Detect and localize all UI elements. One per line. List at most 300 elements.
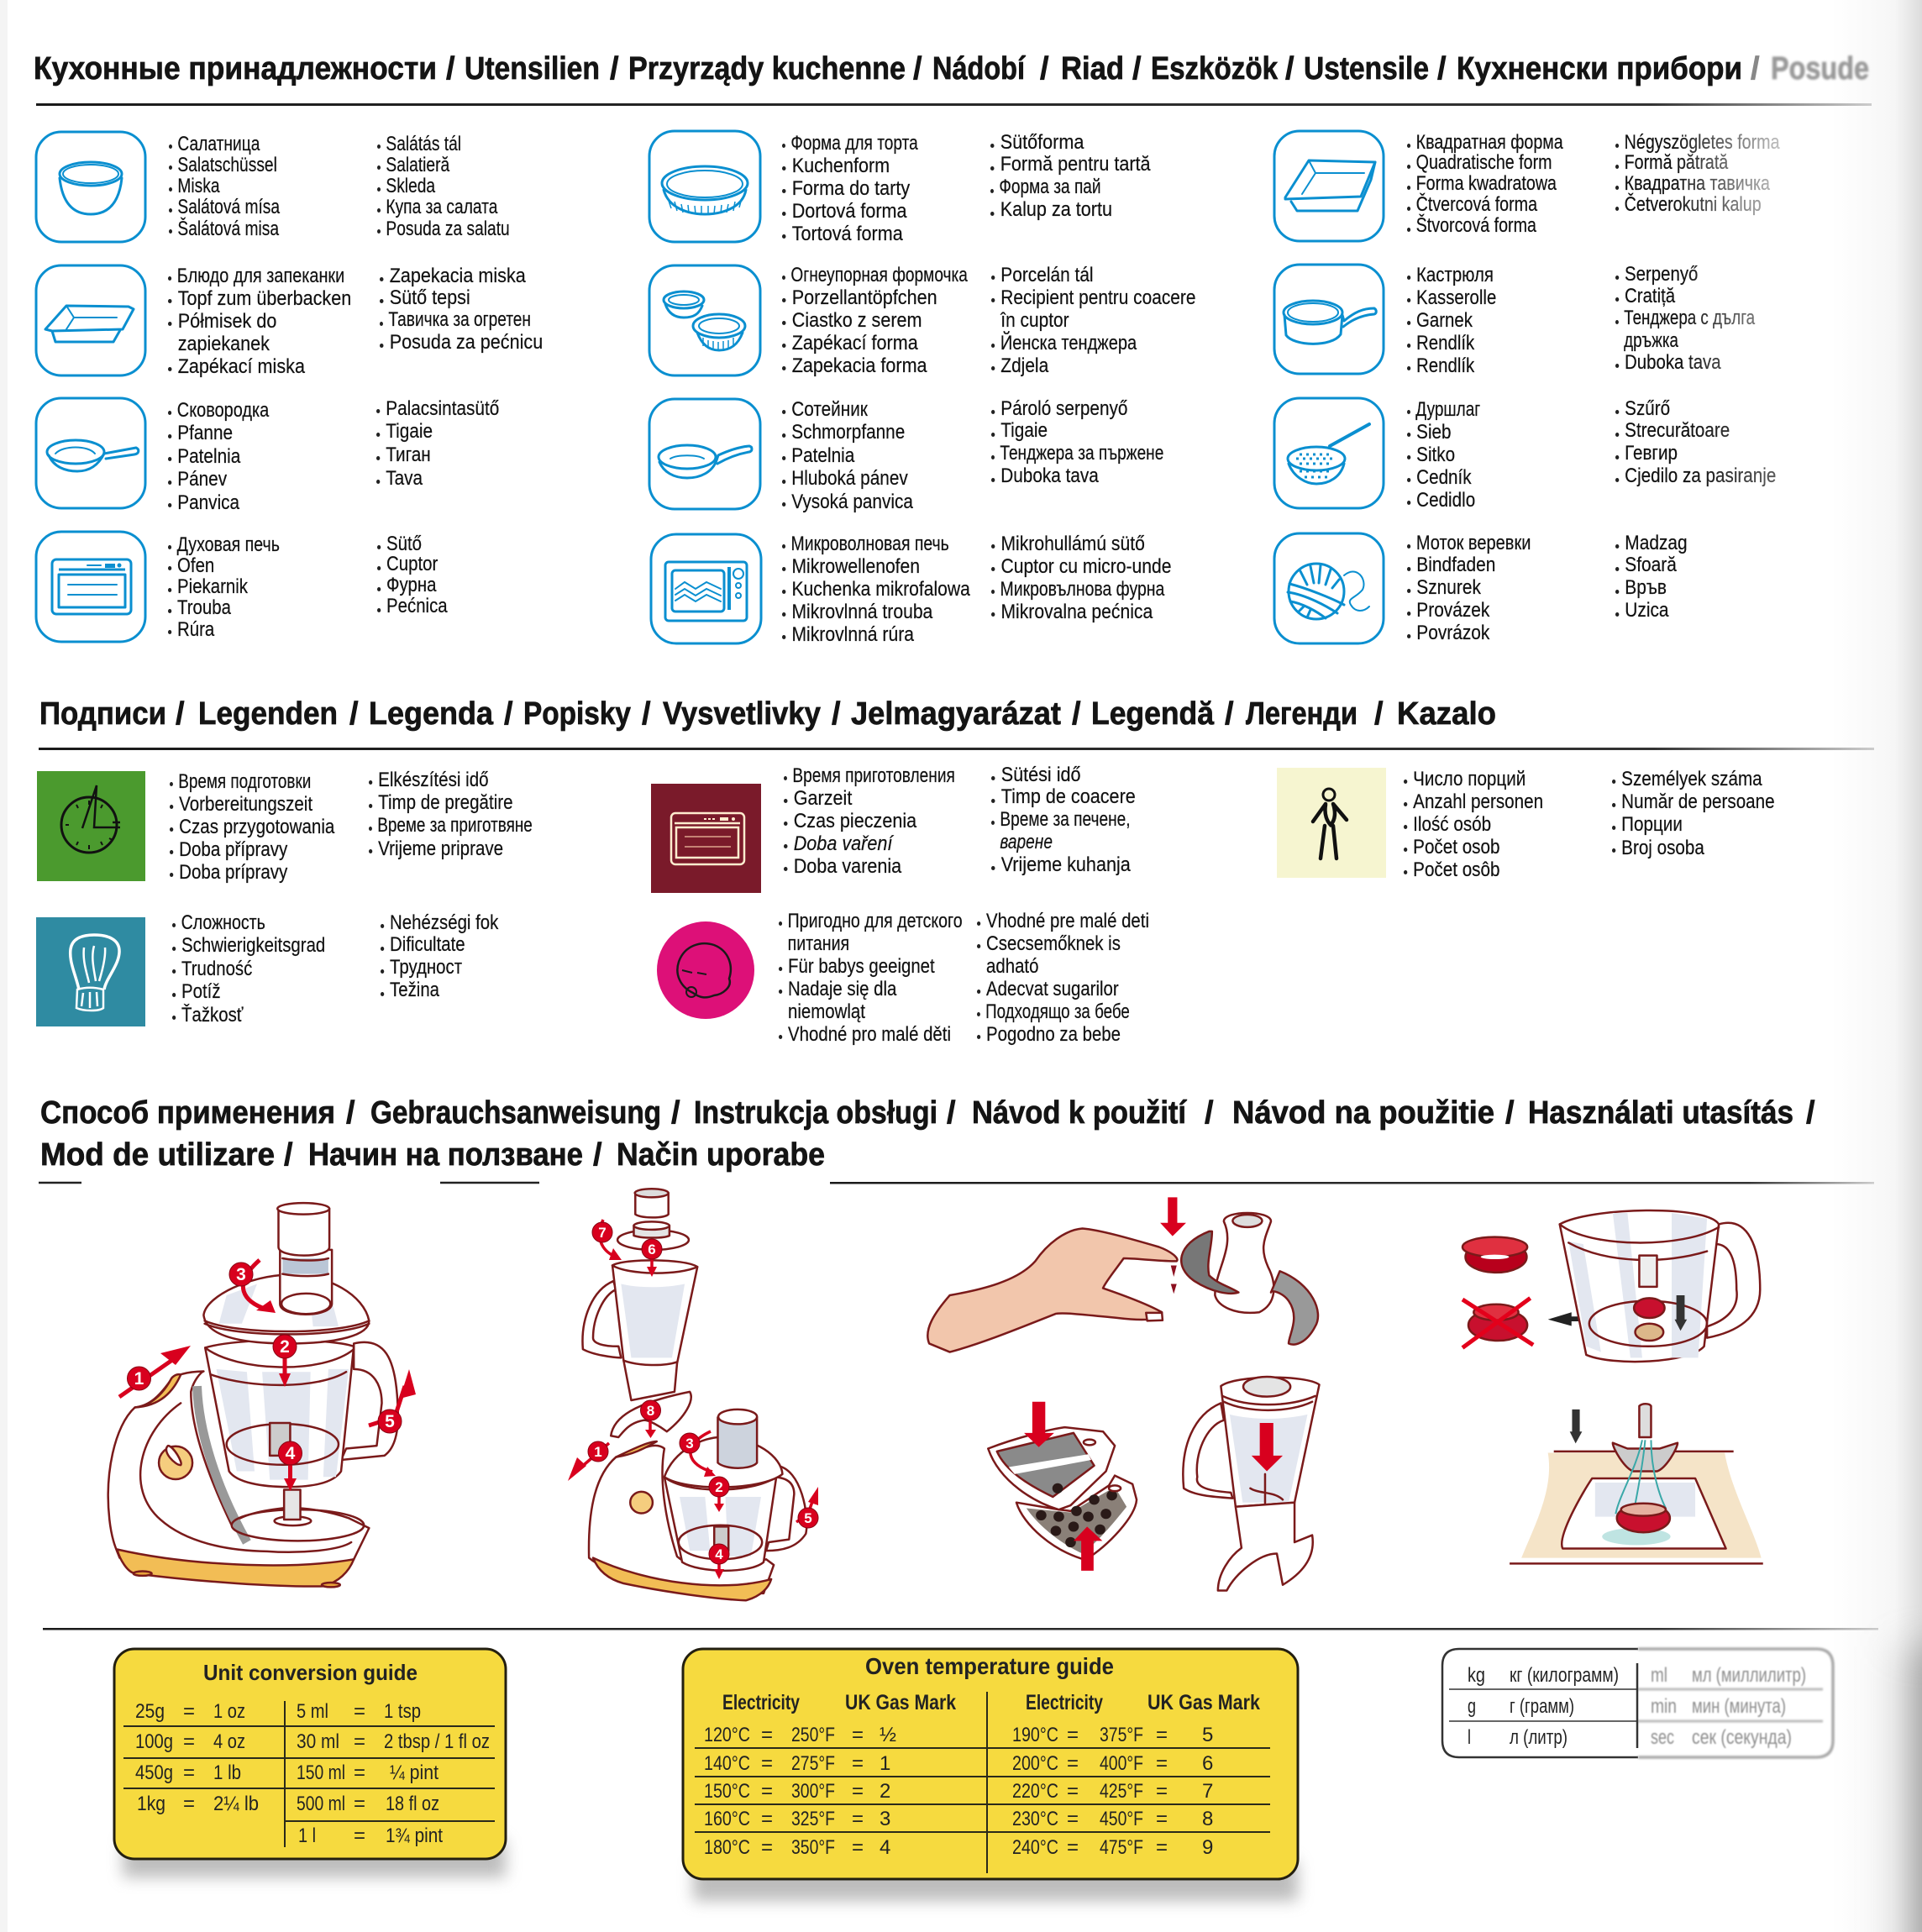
text: preparation time: Doba přípravy	[179, 838, 287, 861]
text: number of servings: Число порций	[1413, 768, 1526, 790]
heading: kitchen utensils: /	[1040, 51, 1049, 87]
table: oven temperature guide: =	[761, 1808, 773, 1830]
text: tart tin names: Dortová forma	[792, 200, 907, 223]
text: oven names, second column: Sütő	[386, 533, 422, 554]
heading: kitchen utensils: Кухонные принадлежности	[34, 51, 437, 87]
text: tart tin names, second column: Sütőforma	[1000, 131, 1084, 153]
text: saute pan names, second column: Tigaie	[1000, 419, 1048, 442]
heading: legends: Legenda	[369, 696, 494, 732]
text: square tin names: Forma kwadratowa	[1416, 172, 1557, 195]
text: preparation time, second column: Vrijeme priprave	[378, 837, 503, 860]
text: gratin dish names: zapiekanek	[178, 333, 270, 355]
text: square tin names	[1407, 131, 1563, 237]
table: abbreviations: кг (килограмм)	[1510, 1664, 1619, 1687]
text: difficulty: Schwierigkeitsgrad	[181, 934, 325, 957]
icon: difficulty toque	[36, 917, 145, 1026]
text: gratin dish names: Zapékací miska	[178, 355, 305, 378]
text: cooking time, second column: варене	[1000, 831, 1053, 853]
table: oven temperature guide: 2	[880, 1780, 890, 1803]
table: oven temperature guide: 8	[1202, 1808, 1213, 1830]
table: oven temperature guide: =	[852, 1724, 864, 1746]
table: oven temperature guide: =	[761, 1724, 773, 1746]
table: oven temperature guide: =	[1067, 1724, 1079, 1746]
text: salad bowl names	[169, 133, 281, 240]
heading: kitchen utensils: /	[610, 51, 619, 87]
text: ramekin names, second column: în cuptor	[1000, 309, 1069, 332]
text: number of servings: Anzahl personen	[1413, 790, 1543, 813]
table: oven temperature guide: 275°F	[791, 1752, 835, 1775]
text: strainer names	[1407, 398, 1480, 512]
table: oven temperature guide: 1	[880, 1752, 890, 1775]
heading: instructions for use: /	[671, 1095, 680, 1131]
table: oven temperature guide: =	[1067, 1808, 1079, 1830]
text: number of servings, second column: Număr de persoane	[1621, 790, 1775, 813]
text: preparation time, second column	[369, 768, 533, 860]
table: oven temperature guide: 180°C	[704, 1836, 750, 1859]
illustration: assembled food processor with numbered steps	[108, 1203, 416, 1587]
text: tart tin names, second column: Форма за пай	[999, 176, 1101, 198]
text: saucepan names, second column: дръжка	[1624, 329, 1678, 352]
text: microwave names, second column: Cuptor cu micro-unde	[1000, 555, 1172, 578]
heading: kitchen utensils: Ustensile	[1304, 51, 1429, 87]
table: oven temperature guide: 240°C	[1012, 1836, 1058, 1859]
illustration: grating discs	[988, 1402, 1137, 1571]
table: unit conversion guide: 500 ml	[297, 1793, 345, 1815]
text: suitable for babies, second column: Подходящо за бебе	[985, 1000, 1130, 1023]
text: microwave names, second column: Mikrohullámú sütő	[1000, 533, 1145, 554]
heading: legends: Kazalo	[1397, 696, 1496, 732]
text: suitable for babies: niemowląt	[788, 1000, 865, 1023]
text: saute pan names: Patelnia	[791, 444, 854, 467]
table: oven temperature guide: =	[1156, 1836, 1168, 1859]
text: microwave names: Kuchenka mikrofalowa	[791, 578, 970, 601]
text: gratin dish names, second column: Sütő tepsi	[390, 286, 470, 309]
table: oven temperature guide: =	[852, 1836, 864, 1859]
heading: kitchen utensils: Przyrządy kuchenne	[628, 51, 906, 87]
heading: instructions for use: Mod de utilizare	[40, 1137, 275, 1173]
heading: legends: Legenden	[198, 696, 338, 732]
text: microwave names: Mikrovlnná trouba	[791, 601, 932, 623]
table: unit conversion guide: ¼ pint	[390, 1761, 438, 1784]
text: microwave names: Микроволновая печь	[791, 533, 949, 554]
text: gratin dish names: Półmisek do	[178, 310, 276, 333]
text: suitable for babies, second column	[977, 909, 1149, 1045]
text: string names, second column	[1615, 531, 1688, 622]
text: tart tin names: Kuchenform	[792, 155, 890, 177]
text: saute pan names: Hluboká pánev	[791, 467, 908, 490]
text: suitable for babies	[779, 909, 970, 1045]
text: cooking time	[784, 764, 955, 878]
text: suitable for babies: Nadaje się dla	[788, 978, 896, 1000]
text: strainer names: Дуршлаг	[1415, 398, 1480, 420]
heading: kitchen utensils: /	[446, 51, 455, 87]
text: suitable for babies, second column: Pogodno za bebe	[986, 1023, 1121, 1045]
text: saute pan names	[782, 398, 913, 512]
table: oven temperature guide: =	[1067, 1780, 1079, 1803]
text: ramekin names: Zapékací forma	[792, 332, 918, 354]
text: frying pan names: Сковородка	[177, 398, 269, 422]
table: abbreviations: l	[1468, 1726, 1471, 1749]
table: oven temperature guide: 425°F	[1100, 1780, 1143, 1803]
table: abbreviations: kg	[1468, 1664, 1485, 1687]
heading: instructions for use: Способ применения	[40, 1095, 335, 1131]
text: difficulty, second column: Nehézségi fok	[390, 911, 498, 934]
text: string names, second column: Sfoară	[1625, 554, 1677, 576]
heading: instructions for use: /	[1505, 1095, 1515, 1131]
text: preparation time: Время подготовки	[178, 769, 311, 793]
text: square tin names: Квадратная форма	[1416, 131, 1563, 153]
table: unit conversion guide: 1¾ pint	[386, 1824, 443, 1847]
text: tart tin names: Forma do tarty	[792, 177, 910, 200]
text: cooking time: Doba vaření	[794, 832, 892, 855]
table: oven temperature guide: 190°C	[1012, 1724, 1058, 1746]
heading: instructions for use: /	[1806, 1095, 1815, 1131]
icon: salad bowl	[36, 132, 145, 242]
table: oven temperature guide: =	[1156, 1780, 1168, 1803]
text: suitable for babies: Für babys geeignet	[788, 954, 935, 978]
table: oven temperature guide: 6	[1202, 1752, 1213, 1775]
text: saute pan names, second column: Тенджера за пържене	[1000, 442, 1163, 465]
text: preparation time: Czas przygotowania	[179, 816, 334, 838]
icon: microwave	[651, 534, 761, 643]
text: salad bowl names: Šalátová misa	[177, 218, 279, 240]
heading: instructions for use	[40, 1095, 1815, 1173]
text: number of servings, second column: Személyek száma	[1621, 768, 1762, 790]
text: difficulty: Ťažkosť	[181, 1003, 243, 1026]
text: oven names: Piekarnik	[177, 575, 248, 598]
text: suitable for babies: Vhodné pro malé děti	[788, 1023, 951, 1045]
text: strainer names: Sitko	[1416, 444, 1455, 466]
table: unit conversion guide: 30 ml	[297, 1730, 339, 1753]
table: oven temperature guide: =	[852, 1780, 864, 1803]
text: tart tin names: Форма для торта	[790, 131, 918, 155]
text: cooking time: Garzeit	[794, 787, 852, 810]
text: square tin names, second column: Četverokutni kalup	[1625, 193, 1762, 216]
text: number of servings, second column: Порции	[1621, 813, 1683, 836]
illustration: blender jug above food processor: 1	[594, 1444, 602, 1460]
text: string names, second column: Madzag	[1625, 531, 1688, 554]
table: oven temperature guide: UK Gas Mark	[1147, 1691, 1260, 1714]
table: oven temperature guide: 7	[1202, 1780, 1213, 1803]
text: string names, second column: Връв	[1625, 576, 1667, 599]
text: oven names: Rúra	[177, 618, 214, 641]
heading: instructions for use: /	[284, 1137, 293, 1173]
text: saucepan names, second column: Cratiță	[1625, 285, 1675, 307]
table: abbreviations: мин (минута)	[1692, 1695, 1786, 1718]
table: unit conversion guide: =	[354, 1793, 365, 1815]
table: unit conversion guide: 4 oz	[213, 1730, 245, 1753]
table: oven temperature guide: 400°F	[1100, 1752, 1143, 1775]
text: cooking time, second column: Vrijeme kuhanja	[1001, 853, 1131, 876]
text: saute pan names: Vysoká panvica	[791, 491, 913, 512]
icon: ball of string	[1274, 533, 1384, 643]
text: strainer names, second column	[1615, 396, 1776, 487]
text: microwave names, second column: Микровълнова фурна	[1000, 578, 1164, 601]
text: gratin dish names, second column: Тавичка за огретен	[388, 308, 531, 331]
table: oven temperature guide: 250°F	[791, 1724, 835, 1746]
heading: instructions for use: Instrukcja obsługi	[694, 1095, 937, 1131]
heading: legends: /	[504, 696, 513, 732]
text: string names, second column: Uzica	[1625, 599, 1669, 622]
table: unit conversion guide: Unit conversion guide	[203, 1660, 417, 1685]
text: oven names: Trouba	[177, 596, 231, 619]
text: strainer names, second column: Strecurătoare	[1625, 419, 1730, 442]
text: difficulty	[172, 911, 325, 1026]
text: number of servings	[1404, 768, 1543, 881]
text: frying pan names, second column	[376, 396, 499, 490]
table: oven temperature guide: UK Gas Mark	[845, 1691, 956, 1714]
heading: kitchen utensils: Eszközök	[1151, 51, 1279, 87]
heading: legends	[39, 696, 1496, 732]
table: abbreviations: sec	[1651, 1726, 1674, 1749]
heading: instructions for use: Návod k použití	[972, 1095, 1187, 1131]
text: oven names: Ofen	[177, 554, 214, 577]
text: tart tin names, second column	[990, 131, 1151, 221]
heading: instructions for use: Návod na použitie	[1232, 1095, 1494, 1131]
text: ramekin names: Zapekacia forma	[792, 354, 927, 377]
heading: kitchen utensils: Nádobí	[932, 51, 1026, 87]
table: unit conversion guide: =	[354, 1730, 365, 1753]
table: oven temperature guide: =	[1067, 1836, 1079, 1859]
text: saucepan names, second column: Serpenyő	[1625, 262, 1698, 286]
text: string names: Povrázok	[1416, 622, 1489, 644]
text: gratin dish names, second column	[380, 264, 543, 354]
text: frying pan names	[168, 398, 269, 514]
text: oven names, second column: Pećnica	[386, 595, 448, 617]
text: saucepan names: Garnek	[1416, 309, 1473, 332]
icon: gratin dish	[36, 265, 145, 375]
illustration: blender jug above food processor: 3	[685, 1436, 694, 1452]
illustration: blender jug above food processor: 4	[715, 1546, 723, 1562]
text: number of servings: Ilość osób	[1413, 813, 1491, 836]
text: preparation time	[170, 769, 334, 884]
table: unit conversion guide: 150 ml	[297, 1761, 345, 1784]
text: oven names, second column: Cuptor	[386, 553, 438, 575]
text: difficulty, second column	[381, 911, 499, 1001]
table: oven temperature guide: =	[1156, 1752, 1168, 1775]
text: salad bowl names, second column	[377, 133, 510, 240]
text: frying pan names, second column: Tigaie	[386, 420, 433, 443]
text: string names: Sznurek	[1416, 576, 1481, 599]
heading: legends: /	[1225, 696, 1234, 732]
text: saucepan names, second column	[1615, 262, 1756, 374]
icon: saute pan	[649, 399, 760, 509]
text: gratin dish names, second column: Posuda za pećnicu	[390, 331, 543, 354]
table: oven temperature guide: =	[761, 1836, 773, 1859]
text: salad bowl names: Miska	[177, 175, 220, 197]
icon: preparation time clock	[37, 771, 145, 881]
text: saute pan names, second column: Pároló serpenyő	[1000, 396, 1127, 420]
text: microwave names: Mikrovlnná rúra	[791, 623, 914, 646]
text: string names: Provázek	[1416, 599, 1489, 622]
table: oven temperature guide: =	[1156, 1724, 1168, 1746]
text: ramekin names: Ciastko z serem	[792, 309, 922, 332]
text: square tin names: Quadratische form	[1416, 151, 1552, 174]
illustration: blender jug above food processor: 2	[715, 1479, 723, 1495]
text: cooking time, second column: Sütési idő	[1001, 763, 1081, 786]
text: frying pan names, second column: Tava	[386, 467, 423, 490]
heading: legends: /	[1374, 696, 1384, 732]
table: oven temperature guide: 9	[1202, 1836, 1213, 1859]
illustration: assembled food processor with numbered steps: 5	[385, 1412, 395, 1431]
illustration: assembled food processor with numbered steps: 4	[286, 1444, 296, 1463]
heading: instructions for use: /	[593, 1137, 602, 1173]
text: gratin dish names: Topf zum überbacken	[178, 287, 351, 310]
text: cooking time, second column: Timp de coacere	[1001, 785, 1136, 808]
heading: kitchen utensils: /	[1285, 51, 1294, 87]
icon: ramekins	[649, 265, 760, 375]
text: number of servings, second column	[1612, 768, 1775, 859]
heading: kitchen utensils: Posude	[1771, 51, 1869, 87]
text: saucepan names: Кастрюля	[1416, 264, 1494, 286]
table: unit conversion guide: 450g	[135, 1761, 173, 1784]
table: unit conversion guide: 1 lb	[213, 1761, 241, 1784]
table: unit conversion guide: =	[183, 1793, 195, 1815]
text: ramekin names, second column: Recipient pentru coacere	[1000, 286, 1195, 309]
text: cooking time, second column	[991, 763, 1136, 876]
table: unit conversion guide: 25g	[135, 1700, 165, 1723]
text: tart tin names, second column: Kalup za tortu	[1000, 198, 1112, 221]
icon: oven	[36, 532, 145, 642]
icon: tart tin	[649, 131, 760, 242]
text: strainer names: Cedník	[1416, 466, 1472, 489]
heading: legends: Подписи	[39, 696, 166, 732]
text: square tin names, second column: Formă pătrată	[1625, 151, 1728, 174]
text: saute pan names: Сотейник	[791, 398, 868, 420]
illustration: blender jug above food processor: 6	[648, 1242, 656, 1257]
text: difficulty: Сложность	[181, 911, 265, 934]
table: oven temperature guide: =	[852, 1808, 864, 1830]
heading: legends: /	[832, 696, 841, 732]
text: ramekin names: Porzellantöpfchen	[792, 286, 937, 309]
table: oven temperature guide: 375°F	[1100, 1724, 1143, 1746]
text: salad bowl names, second column: Salatieră	[386, 154, 449, 176]
table: oven temperature guide	[683, 1649, 1298, 1901]
table: unit conversion guide: 1 oz	[213, 1700, 245, 1723]
heading: instructions for use: /	[346, 1095, 355, 1131]
text: ramekin names, second column: Zdjela	[1000, 354, 1048, 377]
text: saucepan names: Kasserolle	[1416, 286, 1496, 309]
text: string names	[1407, 531, 1531, 644]
table: oven temperature guide: =	[761, 1780, 773, 1803]
table: oven temperature guide: 3	[880, 1808, 890, 1830]
text: saucepan names, second column: Duboka tava	[1625, 351, 1721, 374]
table: unit conversion guide: 1kg	[137, 1793, 165, 1815]
text: frying pan names: Patelnia	[177, 445, 240, 467]
text: cooking time, second column: Време за печене,	[1000, 808, 1131, 831]
text: salad bowl names: Salatschüssel	[177, 154, 277, 176]
table: unit conversion guide: 2¼ lb	[213, 1793, 259, 1815]
text: frying pan names, second column: Palacsintasütő	[386, 396, 499, 420]
text: ramekin names, second column: Йенска тенджера	[1000, 332, 1137, 354]
text: microwave names: Mikrowellenofen	[791, 555, 920, 578]
text: tart tin names	[782, 131, 918, 245]
heading: instructions for use: /	[1205, 1095, 1214, 1131]
text: preparation time, second column: Elkészítési idő	[378, 768, 489, 791]
text: tart tin names: Tortová forma	[792, 223, 903, 245]
table: unit conversion guide	[114, 1649, 506, 1877]
text: number of servings: Počet osob	[1413, 836, 1499, 858]
text: saucepan names, second column: Тенджера с дълга	[1624, 307, 1755, 329]
text: suitable for babies: питания	[788, 932, 849, 954]
table: oven temperature guide: 325°F	[791, 1808, 835, 1830]
text: square tin names: Čtvercová forma	[1416, 193, 1537, 216]
icon: square tin	[1274, 131, 1384, 241]
text: preparation time, second column: Timp de pregătire	[378, 791, 513, 814]
text: salad bowl names: Салатница	[177, 133, 260, 155]
text: saucepan names: Rendlík	[1416, 354, 1474, 377]
text: ramekin names, second column: Porcelán tál	[1000, 264, 1094, 286]
table: unit conversion guide: =	[354, 1700, 365, 1723]
text: suitable for babies: Пригодно для детского	[788, 909, 963, 932]
table: oven temperature guide: 350°F	[791, 1836, 835, 1859]
text: saucepan names	[1407, 264, 1496, 377]
text: strainer names: Sieb	[1416, 421, 1452, 444]
table: unit conversion guide: 18 fl oz	[386, 1793, 439, 1815]
table: oven temperature guide: 450°F	[1100, 1808, 1143, 1830]
text: oven names, second column: Фурна	[386, 574, 436, 596]
text: difficulty: Potíž	[181, 980, 221, 1003]
heading: kitchen utensils: /	[1751, 51, 1760, 87]
table: oven temperature guide: Electricity	[722, 1691, 800, 1714]
icon: frying pan	[36, 398, 145, 508]
table: oven temperature guide: 300°F	[791, 1780, 835, 1803]
heading: instructions for use: /	[947, 1095, 956, 1131]
text: frying pan names: Panvica	[177, 491, 239, 514]
table: unit conversion guide: 5 ml	[297, 1700, 328, 1723]
text: gratin dish names: Блюдо для запеканки	[177, 264, 344, 287]
heading: instructions for use: Начин на ползване	[308, 1137, 583, 1173]
heading: kitchen utensils	[34, 51, 1869, 87]
text: gratin dish names	[168, 264, 351, 378]
icon: cooking time oven	[651, 784, 761, 893]
illustration: blender jug above food processor: 7	[598, 1225, 607, 1241]
table: oven temperature guide: 5	[1202, 1724, 1213, 1746]
text: preparation time, second column: Време за приготвяне	[377, 814, 533, 837]
text: string names: Bindfaden	[1416, 554, 1495, 576]
text: microwave names, second column: Mikrovalna pećnica	[1000, 601, 1153, 623]
heading: kitchen utensils: /	[1437, 51, 1447, 87]
table: abbreviations: g	[1468, 1695, 1476, 1718]
text: difficulty, second column: Dificultate	[390, 933, 465, 956]
table: unit conversion guide: =	[354, 1761, 365, 1784]
text: salad bowl names, second column: Posuda za salatu	[386, 218, 510, 240]
illustration: hand holding sharp blade	[927, 1197, 1318, 1352]
text: salad bowl names, second column: Salátás tál	[386, 133, 461, 155]
heading: legends: /	[1072, 696, 1081, 732]
text: strainer names, second column: Szűrő	[1625, 396, 1670, 420]
text: saute pan names, second column	[991, 396, 1163, 487]
illustration: jug with seal warning	[1463, 1210, 1760, 1362]
text: difficulty, second column: Трудност	[390, 956, 462, 979]
text: string names: Моток веревки	[1416, 531, 1531, 554]
table: oven temperature guide: 120°C	[704, 1724, 750, 1746]
heading: legends: /	[642, 696, 651, 732]
table: unit conversion guide: =	[183, 1700, 195, 1723]
text: tart tin names, second column: Formă pentru tartă	[1000, 153, 1151, 176]
text: square tin names, second column: Négyszögletes forma	[1625, 131, 1780, 153]
heading: instructions for use: Način uporabe	[617, 1137, 825, 1173]
text: frying pan names: Pánev	[177, 468, 227, 491]
table: unit conversion guide: 2 tbsp / 1 fl oz	[384, 1730, 490, 1753]
table: oven temperature guide: =	[1067, 1752, 1079, 1775]
illustration: assembled food processor with numbered steps: 3	[236, 1265, 246, 1284]
text: frying pan names: Pfanne	[177, 422, 233, 444]
heading: kitchen utensils: Кухненски прибори	[1457, 51, 1742, 87]
text: number of servings, second column: Broj osoba	[1621, 837, 1704, 859]
table: abbreviations: г (грамм)	[1510, 1695, 1574, 1718]
heading: legends: Легенди	[1246, 696, 1357, 732]
